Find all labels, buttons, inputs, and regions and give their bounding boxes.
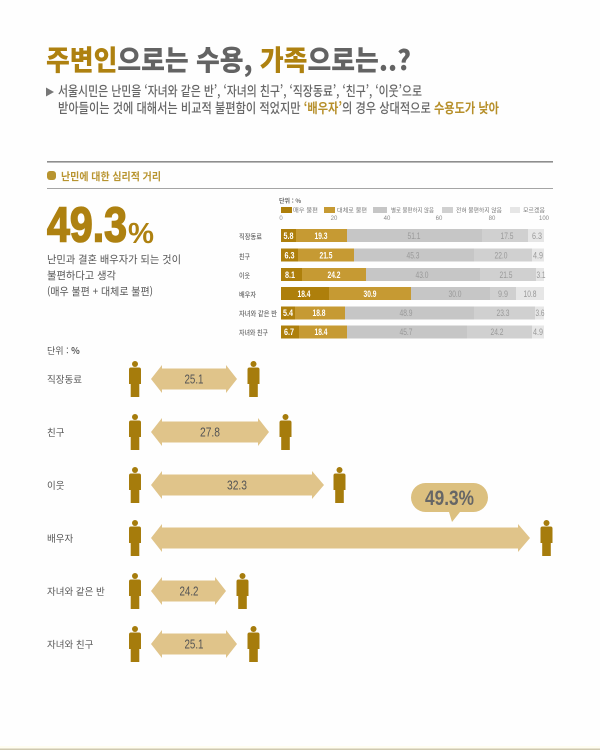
distance row: 자녀와 같은 반 xyxy=(47,573,248,609)
title: 주변인으로는 수용, 가족으로는..? xyxy=(46,39,411,79)
chart legend: 대체로 불편 xyxy=(337,206,367,214)
row: 배우자 xyxy=(239,287,544,300)
key stat: 49.3 xyxy=(47,198,127,252)
chart axis: 60 xyxy=(436,216,443,222)
row: 이웃: 3.1 xyxy=(536,270,546,280)
chart legend: 전혀 불편하지 않음 xyxy=(456,206,502,214)
row: 배우자: 10.8 xyxy=(524,289,536,299)
stacked bar chart xyxy=(239,196,550,338)
row: 이웃: 24.2 xyxy=(328,270,340,280)
intro text: 서울시민은 난민을 ‘자녀와 같은 반’, ‘자녀의 친구’, ‘직장동료’, ‘친구’, ‘이웃’으로 xyxy=(58,80,422,100)
row: 이웃: 43.0 xyxy=(416,270,428,280)
row: 자녀와 같은 반 xyxy=(239,306,544,320)
chart axis xyxy=(279,216,550,222)
row: 직장동료: 직장동료 xyxy=(239,232,262,242)
row: 이웃: 이웃 xyxy=(239,271,250,281)
row: 자녀와 같은 반: 3.6 xyxy=(536,308,544,318)
chart axis: 100 xyxy=(539,216,550,222)
row: 친구: 22.0 xyxy=(494,250,508,260)
row: 친구: 6.3 xyxy=(284,250,294,260)
row: 배우자: 30.0 xyxy=(448,289,462,299)
chart legend xyxy=(281,206,545,214)
row: 자녀와 친구: 6.7 xyxy=(284,327,294,337)
row: 자녀와 같은 반: 48.9 xyxy=(400,308,412,318)
distance row: 직장동료: 25.1 xyxy=(184,372,204,386)
distance row: 친구: 27.8 xyxy=(200,426,220,440)
stat description xyxy=(47,252,181,299)
callout: 49.3%: 49.3% xyxy=(425,487,474,510)
row: 배우자: 배우자 xyxy=(239,290,256,300)
chart legend: 모르겠음 xyxy=(523,206,545,214)
distance row: 배우자 xyxy=(47,520,552,556)
section heading: 난민에 대한 심리적 거리 xyxy=(61,169,161,184)
row: 친구: 45.3 xyxy=(406,250,420,260)
row: 배우자: 18.4 xyxy=(298,289,310,299)
distance row: 자녀와 친구: 25.1 xyxy=(184,638,204,652)
row: 친구 xyxy=(239,248,544,262)
row: 자녀와 같은 반: 23.3 xyxy=(496,308,510,318)
distance row: 이웃 xyxy=(47,467,346,503)
row: 자녀와 친구: 18.4 xyxy=(314,327,328,337)
chart axis: 80 xyxy=(489,216,496,222)
row: 자녀와 같은 반: 자녀와 같은 반 xyxy=(239,309,277,319)
row: 직장동료: 19.3 xyxy=(314,231,328,241)
stat description: 난민과 결혼 배우자가 되는 것이 xyxy=(47,252,181,267)
distance row: 직장동료: 직장동료 xyxy=(47,372,82,386)
row: 친구: 21.5 xyxy=(320,250,332,260)
row: 배우자: 30.9 xyxy=(364,289,376,299)
row: 자녀와 친구: 45.7 xyxy=(400,327,412,337)
distance row: 자녀와 같은 반: 자녀와 같은 반 xyxy=(47,584,105,598)
row: 자녀와 친구: 24.2 xyxy=(490,327,504,337)
distance row: 자녀와 친구: 자녀와 친구 xyxy=(47,637,94,651)
row: 자녀와 같은 반: 5.4 xyxy=(283,308,293,318)
distance row: 직장동료 xyxy=(47,361,260,397)
row: 직장동료: 5.8 xyxy=(284,231,294,241)
chart axis: 0 xyxy=(279,216,283,222)
distance row: 친구 xyxy=(47,414,292,450)
intro text: 받아들이는 것에 대해서는 비교적 불편함이 적었지만 ‘배우자’의 경우 상대적으로 수용도가 낮아 xyxy=(58,97,499,117)
chart legend: 별로 불편하지 않음 xyxy=(391,206,434,214)
row: 이웃: 8.1 xyxy=(285,270,295,280)
chart axis: 20 xyxy=(331,216,338,222)
row: 직장동료: 6.3 xyxy=(532,231,542,241)
distance row: 자녀와 같은 반: 24.2 xyxy=(180,584,199,598)
distance row: 친구: 친구 xyxy=(47,425,65,439)
distance row: 이웃: 32.3 xyxy=(227,478,247,492)
row: 배우자: 9.9 xyxy=(498,289,508,299)
chart unit label: 단위 : % xyxy=(279,196,301,205)
distance chart unit label: 단위 : % xyxy=(47,344,80,357)
section heading xyxy=(47,161,553,189)
intro text xyxy=(46,80,499,117)
row: 자녀와 친구: 자녀와 친구 xyxy=(239,328,268,338)
row: 직장동료 xyxy=(239,229,544,242)
row: 이웃 xyxy=(239,268,546,281)
chart axis: 40 xyxy=(384,216,391,222)
row: 자녀와 친구: 4.9 xyxy=(533,327,543,337)
row: 자녀와 친구 xyxy=(239,326,544,338)
row: 자녀와 같은 반: 18.8 xyxy=(312,308,326,318)
row: 친구: 4.9 xyxy=(533,250,543,260)
key stat: % xyxy=(128,218,154,250)
row: 직장동료: 17.5 xyxy=(500,231,514,241)
stat description: 불편하다고 생각 xyxy=(47,268,116,283)
distance row: 배우자: 배우자 xyxy=(47,531,73,545)
callout: 49.3% xyxy=(411,483,488,522)
row: 직장동료: 51.1 xyxy=(408,231,420,241)
chart legend: 매우 불편 xyxy=(293,206,318,214)
row: 친구: 친구 xyxy=(239,252,250,262)
distance row: 자녀와 친구 xyxy=(47,626,260,662)
distance row: 이웃: 이웃 xyxy=(47,478,65,492)
row: 이웃: 21.5 xyxy=(500,270,512,280)
stat description: (매우 불편 + 대체로 불편) xyxy=(47,284,153,299)
